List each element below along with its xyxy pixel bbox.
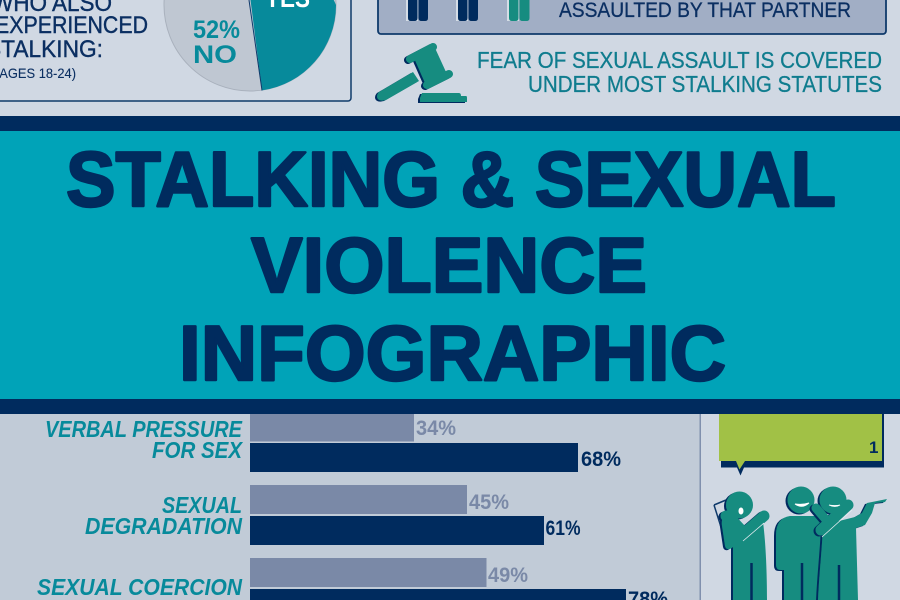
panel: stalking pie [0,0,351,101]
group: sexual degradation: SEXUAL [162,492,242,518]
text: who also experienced stalking [0,0,148,81]
group: verbal pressure for sex: 68% [581,448,621,471]
callout: speech bubble [719,414,884,476]
group: verbal pressure for sex: VERBAL PRESSURE [45,416,243,442]
group: verbal pressure for sex: 34% [416,417,456,440]
group: sexual degradation: DEGRADATION [85,513,242,539]
figure: pointing person [816,486,887,600]
callout: speech bubble: 1 [869,438,878,457]
pie chart [164,0,336,91]
group: verbal pressure for sex [45,414,621,472]
title: STALKING & SEXUAL [66,135,836,223]
group: sexual coercion: 49% [488,564,528,587]
panel: assaulted by partner [378,0,886,34]
pie chart: NO [193,41,237,69]
text: fear of sexual assault [477,47,882,97]
group: sexual degradation: 61% [546,517,581,540]
icon: gavel [377,47,467,102]
group: sexual degradation [85,485,581,545]
title banner [0,116,900,414]
title: INFOGRAPHIC [179,309,726,397]
group: sexual coercion: SEXUAL COERCION [37,574,242,600]
title: VIOLENCE [251,221,647,309]
group: sexual degradation: 45% [469,491,509,514]
text: who also experienced stalking: EXPERIENCED [0,12,148,39]
pie chart: 52% [193,16,240,44]
title [66,135,836,397]
icon: people legs [406,0,530,21]
figure: middle person [776,486,824,600]
icon: gossiping people [714,486,887,600]
group: verbal pressure for sex: FOR SEX [152,437,243,463]
group: sexual coercion [37,558,668,600]
panel: bar chart [0,414,701,600]
figure: person on phone [714,492,767,600]
